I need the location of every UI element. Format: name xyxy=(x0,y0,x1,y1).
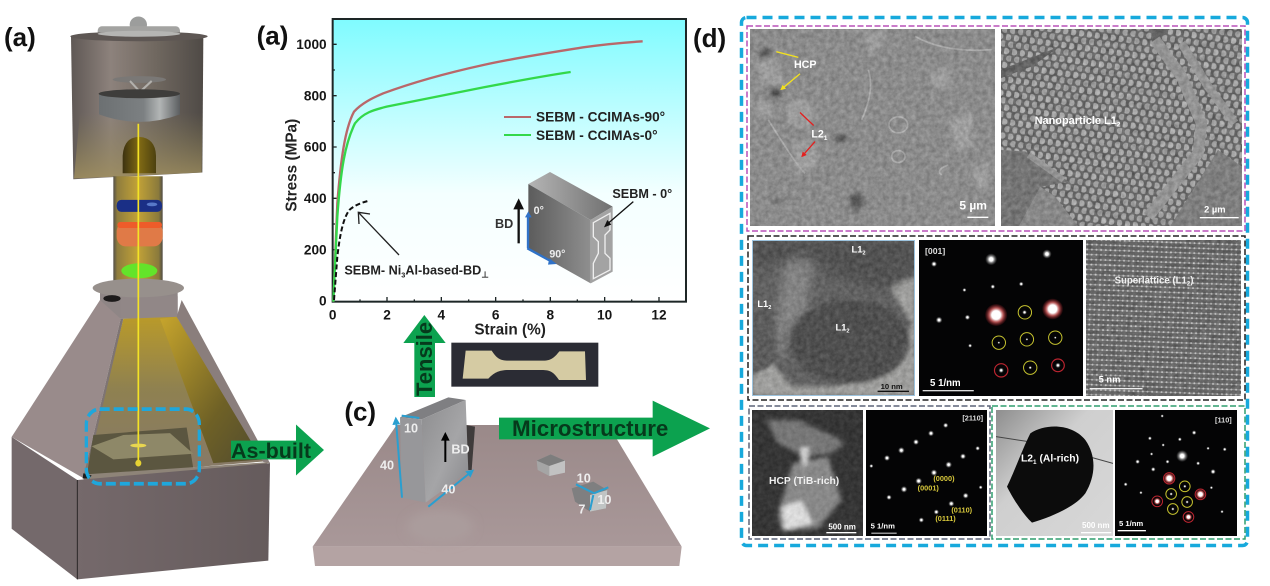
x axis ticks and labels: 0 xyxy=(329,307,337,322)
scale bar 5 1/nm: 5 1/nm xyxy=(1119,519,1143,528)
label: Nanoparticle L12: 2 xyxy=(1117,121,1121,129)
HCP label: HCP xyxy=(794,59,816,71)
label: (d): (d) xyxy=(693,23,726,53)
panel: TEM images xyxy=(748,236,1245,400)
x axis ticks and labels: 12 xyxy=(651,307,667,322)
pink dashed frame xyxy=(747,26,1245,231)
curve: SEBM CCIMAs 90 xyxy=(333,41,643,302)
label: L21 (Al-rich): (Al-rich) xyxy=(1037,454,1079,465)
scale bar 5 nm: 5 nm xyxy=(1099,375,1120,385)
small specimen with dimensions xyxy=(572,472,611,516)
inset: block with specimen: BD xyxy=(495,217,513,231)
large block: 40 xyxy=(380,458,394,472)
image: diffraction pattern [001] xyxy=(919,240,1083,396)
image: HCP diffraction pattern xyxy=(866,410,987,536)
large block xyxy=(380,397,475,507)
x axis ticks and labels: 6 xyxy=(492,307,500,322)
small specimen with dimensions: 10 xyxy=(577,472,591,486)
y axis ticks and labels: 800 xyxy=(304,88,327,103)
scale bar 2 um: 2 µm xyxy=(1204,205,1225,215)
L21 label: 1 xyxy=(824,135,828,142)
gray dashed frame xyxy=(749,406,990,539)
x axis ticks and labels: 2 xyxy=(383,307,391,322)
y axis ticks and labels: 600 xyxy=(304,140,327,155)
panel: SEM images xyxy=(747,26,1245,231)
scale bar 5 um: 5 µm xyxy=(959,198,987,212)
dashed highlight box xyxy=(86,409,199,484)
panel: stress-strain chart xyxy=(257,19,686,339)
arrow: As-built shape xyxy=(231,424,324,476)
small cube xyxy=(537,454,565,476)
label: Superlattice (L12): Superlattice (L1 xyxy=(1115,275,1187,286)
panel: microstructure outer frame xyxy=(742,18,1248,546)
scale bar 2 um xyxy=(1200,205,1239,218)
zone axis label: [110] xyxy=(1215,416,1232,425)
scale bar 5 1/nm xyxy=(923,378,974,391)
image: low magnification SEM xyxy=(750,29,995,226)
annotation arrow xyxy=(358,212,399,255)
L21 arrows xyxy=(800,112,815,155)
x axis ticks and labels: 10 xyxy=(597,307,613,322)
panel: HCP phase xyxy=(749,406,990,539)
y axis ticks and labels: 400 xyxy=(304,191,327,206)
scale bar 5 1/nm: 5 1/nm xyxy=(930,378,961,389)
build plate inside chamber xyxy=(83,428,270,480)
hood chamber xyxy=(12,300,270,478)
label: L21 (Al-rich): L2 xyxy=(1021,454,1033,465)
annotation label: SEBM- Ni xyxy=(344,264,401,278)
inset: block with specimen xyxy=(495,172,672,283)
arrow: Tensile xyxy=(403,315,446,397)
label: Nanoparticle L12: Nanoparticle L1 xyxy=(1035,115,1117,127)
large block: 40 xyxy=(441,482,455,496)
arrow: Microstructure: Microstructure xyxy=(512,416,668,441)
indexed spot labels: (0111) xyxy=(935,514,956,523)
green dashed frame xyxy=(992,406,1245,539)
small specimen with dimensions: 10 xyxy=(597,493,611,507)
x axis ticks and labels xyxy=(329,297,667,322)
y axis ticks and labels: 0 xyxy=(319,294,327,309)
arrow: Tensile: Tensile xyxy=(412,322,437,396)
plot area xyxy=(333,19,686,302)
image: nanoparticle SEM xyxy=(1001,29,1242,226)
photo: tensile specimen xyxy=(451,343,598,387)
label: As-built: As-built xyxy=(231,439,311,463)
panel: L21 phase xyxy=(992,406,1245,539)
curve: SEBM CCIMAs 0 xyxy=(333,72,571,302)
indexed spot labels: (0110) xyxy=(951,506,973,515)
curve: Ni3Al dashed xyxy=(334,201,369,300)
image: TEM bright field xyxy=(752,240,915,396)
yellow indicator circles xyxy=(992,306,1062,374)
scale bar 500 nm: 500 nm xyxy=(828,522,856,531)
upper chamber xyxy=(70,16,208,179)
scale bar 10 nm: 10 nm xyxy=(881,382,903,391)
x axis title: Strain (%) xyxy=(474,322,546,339)
label: (a) machine: (a) xyxy=(4,22,36,52)
y axis ticks and labels xyxy=(296,37,337,309)
zone axis label: [2110] xyxy=(962,414,984,423)
black dashed frame xyxy=(748,236,1245,400)
label: HCP (TiB-rich): HCP (TiB-rich) xyxy=(769,476,839,487)
scale bar 500 nm: 500 nm xyxy=(1082,521,1110,530)
red indicator circles xyxy=(1152,473,1206,522)
indexed spot labels xyxy=(918,474,973,523)
L21 label: L2 xyxy=(811,129,824,141)
HCP arrows xyxy=(776,52,800,88)
electron gun xyxy=(123,137,156,173)
deflection ring assembly xyxy=(99,76,180,122)
label: (c): (c) xyxy=(344,397,376,427)
panel: as-built plate and specimens xyxy=(313,315,710,566)
y axis title: Stress (MPa) xyxy=(284,119,301,212)
inset: block with specimen: SEBM - 0° xyxy=(612,187,672,201)
scale bar 10 nm xyxy=(878,382,909,392)
annotation label: Al-based-BD xyxy=(405,264,481,278)
build plate xyxy=(313,425,682,566)
image: high resolution superlattice xyxy=(1086,240,1241,396)
electron beam xyxy=(130,124,146,466)
image: L21 bright field xyxy=(996,410,1113,536)
inset: block with specimen: 90° xyxy=(549,249,565,261)
column with lenses xyxy=(113,176,163,282)
large block: 10 xyxy=(404,422,418,436)
L12 labels: L1 xyxy=(757,299,768,309)
arrow: Microstructure xyxy=(499,401,710,457)
L12 labels: 2 xyxy=(846,329,850,335)
x axis ticks and labels: 4 xyxy=(438,307,446,322)
large block: BD xyxy=(451,442,470,456)
label: L21 (Al-rich): 1 xyxy=(1033,459,1037,466)
y axis ticks and labels: 200 xyxy=(304,242,327,257)
scale bar 5 nm xyxy=(1090,375,1143,389)
L12 labels: L1 xyxy=(852,245,862,255)
inset: block with specimen: 0° xyxy=(534,205,544,217)
annotation label: 3 xyxy=(401,270,405,279)
indexed spot labels: (0000) xyxy=(933,474,955,483)
indexed spot labels: (0001) xyxy=(918,484,939,493)
label: Superlattice (L12): 2 xyxy=(1187,282,1191,288)
panel: electron beam melting machine xyxy=(4,16,324,579)
legend: SEBM - CCIMAs-90° xyxy=(536,110,665,125)
scale bar 5 1/nm: 5 1/nm xyxy=(871,522,895,531)
L12 labels: 2 xyxy=(768,305,771,311)
label: (a) chart: (a) xyxy=(257,21,288,51)
y axis ticks and labels: 1000 xyxy=(296,37,327,52)
small specimen with dimensions: 7 xyxy=(578,502,585,516)
annotation label: ⊥ xyxy=(481,269,489,279)
legend: SEBM - CCIMAs-0° xyxy=(536,128,658,143)
zone axis label: [001] xyxy=(925,246,945,256)
label: Superlattice (L12): ) xyxy=(1190,275,1193,286)
image: HCP dark field xyxy=(752,410,863,536)
L12 labels: L1 xyxy=(836,323,846,333)
red indicator circles xyxy=(994,359,1064,377)
flange xyxy=(93,279,184,319)
yellow indicator circles xyxy=(1166,481,1192,514)
base box xyxy=(12,437,270,579)
x axis ticks and labels: 8 xyxy=(547,307,555,322)
L12 labels xyxy=(757,245,866,335)
machine drawing xyxy=(12,16,324,579)
scale bar 5 um xyxy=(959,198,988,218)
L12 labels: 2 xyxy=(862,251,866,257)
legend xyxy=(504,110,665,143)
image: L21 diffraction pattern xyxy=(1115,410,1237,536)
